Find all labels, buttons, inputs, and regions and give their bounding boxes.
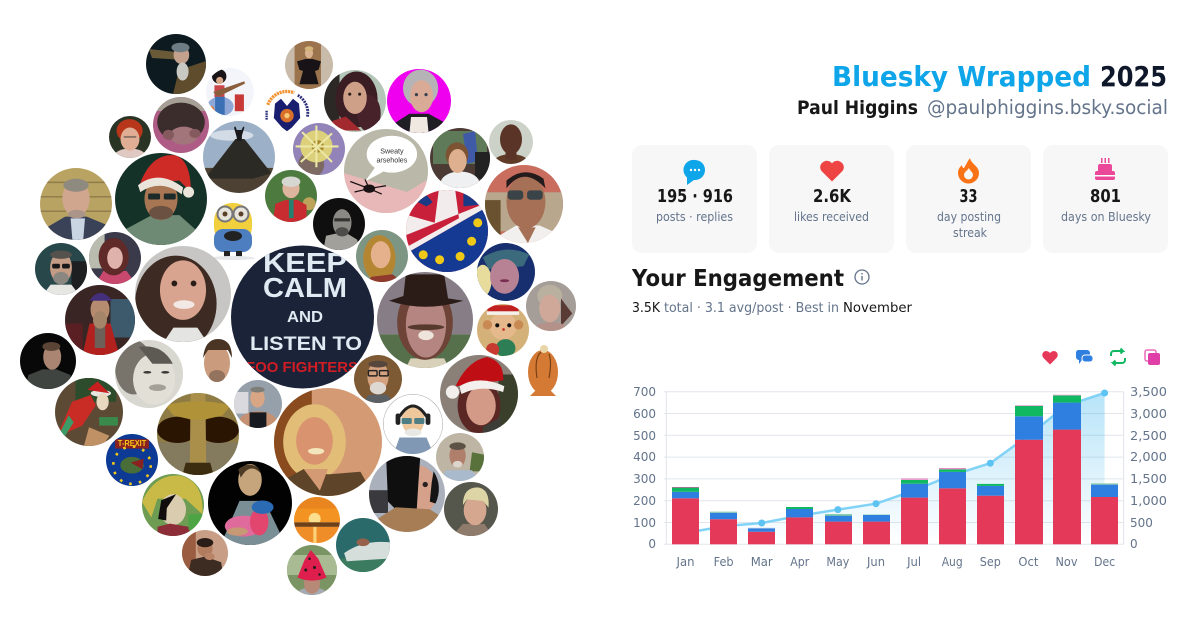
stat card: likes: likes received — [794, 210, 869, 224]
avatar: keep calm poster: CALM — [263, 272, 347, 303]
avatar cluster — [20, 34, 576, 600]
right axis labels: 1,500 — [1130, 472, 1167, 486]
user name and handle — [797, 96, 1168, 119]
bar: Mar — [748, 528, 775, 544]
bar: Oct — [1015, 405, 1043, 544]
avatar: bald man on brick wall — [40, 168, 112, 240]
avatar: keep calm poster: AND — [287, 309, 323, 326]
month labels: Apr — [790, 555, 809, 569]
left axis labels: 400 — [633, 450, 656, 464]
avatar: woman with short blonde hair — [444, 482, 498, 536]
month labels: Aug — [942, 555, 963, 569]
left axis labels: 200 — [633, 494, 656, 508]
month labels: Nov — [1056, 555, 1078, 569]
bar: Dec — [1091, 483, 1118, 544]
cumulative area — [686, 393, 1105, 544]
stat card: posts and replies: posts · replies — [656, 210, 733, 224]
avatar: keep calm poster — [231, 245, 375, 389]
avatar: stone mound — [203, 121, 275, 193]
avatar: man in sunglasses — [485, 165, 563, 243]
left axis labels: 500 — [633, 429, 656, 443]
avatar: woman in santa hat — [440, 355, 518, 434]
avatar: blonde grey woman on magenta — [387, 69, 451, 133]
avatar: t-rexit badge: T-REXIT — [118, 439, 147, 448]
avatar: santa doll — [477, 304, 529, 357]
engagement summary — [632, 300, 912, 316]
avatar: older man with glasses — [354, 355, 402, 403]
user name and handle: @paulphiggins.bsky.social — [927, 96, 1168, 119]
month labels: Jan — [676, 555, 694, 569]
avatar: macaw parrot — [55, 378, 123, 446]
icon: heart — [820, 161, 844, 182]
bar: Jan — [672, 487, 699, 544]
month labels: Dec — [1094, 555, 1115, 569]
bar: Apr — [786, 507, 813, 544]
avatar: red haired older woman — [109, 116, 151, 158]
month labels: May — [826, 555, 849, 569]
avatar: keep calm poster: KEEP — [263, 247, 347, 278]
avatar: UK and EU flag — [406, 190, 488, 272]
stat card: days on Bluesky — [1043, 145, 1168, 253]
avatar: t-rexit badge — [106, 434, 158, 486]
avatar: man in red pointed hat — [287, 545, 337, 600]
icon: flame — [958, 158, 979, 184]
stat card: streak — [906, 145, 1031, 253]
avatar: depressed families logo — [265, 90, 310, 132]
left axis labels — [633, 385, 656, 551]
engagement chart — [633, 385, 1167, 569]
avatar: woman in blue light — [474, 243, 535, 301]
left axis labels: 100 — [633, 516, 656, 530]
avatar: illustrated blonde woman — [356, 230, 408, 282]
stat card: likes: 2.6K — [813, 187, 852, 207]
avatar: spider with speech bubble: arseholes — [376, 157, 408, 165]
engagement summary: 3.5K — [632, 300, 661, 316]
bar: Aug — [939, 468, 966, 544]
avatar: keep calm poster: LISTEN TO — [250, 334, 362, 355]
left axis labels: 600 — [633, 407, 656, 421]
stat card: days on Bluesky: 801 — [1090, 187, 1121, 207]
left axis labels: 700 — [633, 385, 656, 399]
title: 2025 — [1100, 61, 1167, 93]
avatar: woman with EU flags — [430, 128, 490, 188]
icon: legend reposts — [1111, 348, 1125, 366]
avatar: black and white bearded man — [313, 198, 365, 250]
stat card: posts and replies: 195 · 916 — [657, 187, 733, 207]
month labels: Jul — [906, 555, 921, 569]
month labels: Oct — [1018, 555, 1039, 569]
avatar: woman with grey hair — [526, 281, 576, 331]
avatar: old man portrait — [146, 34, 206, 94]
left axis labels: 300 — [633, 472, 656, 486]
stat card: streak: 33 — [960, 187, 978, 207]
avatar: young woman with auburn hair — [89, 232, 141, 284]
icon: cake — [1095, 158, 1115, 180]
avatar: sunset — [294, 497, 340, 543]
title: Bluesky Wrapped — [832, 61, 1091, 93]
grid lines — [664, 392, 1124, 544]
right axis labels: 500 — [1130, 516, 1153, 530]
month labels — [676, 555, 1115, 569]
avatar: woman in black dress — [285, 41, 333, 89]
bar: Jul — [901, 478, 928, 544]
left axis labels: 0 — [648, 537, 656, 551]
bar: Jun — [863, 514, 890, 544]
cumulative line — [686, 393, 1105, 533]
icon: info — [855, 270, 869, 284]
avatar: man with hand on chin — [182, 530, 228, 576]
chart legend — [1042, 348, 1160, 366]
avatar: man in santa hat — [115, 153, 207, 245]
bar: Sep — [977, 484, 1004, 544]
right axis labels: 1,000 — [1130, 494, 1167, 508]
month labels: Jun — [866, 555, 885, 569]
icon: legend replies — [1076, 350, 1093, 364]
line points — [758, 390, 1108, 526]
stat card: likes — [769, 145, 894, 253]
avatar: keep calm poster: FOO FIGHTERS — [246, 359, 358, 376]
engagement summary: total · 3.1 avg/post · Best in — [664, 300, 839, 316]
icon: legend quotes — [1145, 350, 1160, 365]
avatar: woman in green cloche hat — [142, 474, 204, 536]
stat card: posts and replies — [632, 145, 757, 253]
avatar: black and white blonde woman — [115, 340, 183, 408]
right axis labels: 2,500 — [1130, 429, 1167, 443]
avatar: surfer — [336, 518, 390, 572]
right axis labels: 0 — [1130, 537, 1138, 551]
avatar: man in black vest — [234, 380, 282, 428]
avatar: man on dark background — [20, 333, 76, 389]
avatar: hedgehog — [153, 97, 209, 153]
avatar: grey haired man outdoors — [436, 433, 484, 481]
icon: chat bubble — [683, 160, 705, 185]
month labels: Sep — [980, 555, 1001, 569]
avatar: gold helmet mask — [157, 393, 239, 475]
avatar: bearded man with black glasses — [35, 243, 87, 295]
avatar: blonde woman in leopard print — [274, 388, 382, 496]
avatar: orange cartoon creature — [528, 345, 558, 396]
avatar: older woman in red cardigan — [265, 170, 317, 222]
right axis labels: 2,000 — [1130, 450, 1167, 464]
avatar: woman with long dark hair — [324, 70, 386, 132]
heading: your engagement: Your Engagement — [631, 266, 844, 292]
stat card: streak: day posting — [937, 210, 1001, 224]
bar: Feb — [710, 512, 737, 544]
avatar: minion — [211, 203, 255, 260]
avatar: guitarist illustration — [206, 68, 254, 116]
month labels: Feb — [714, 555, 734, 569]
avatar: wizard man in red — [65, 285, 135, 355]
avatar: lady with an ermine parody — [208, 461, 292, 545]
avatar: yellow flower — [293, 123, 345, 178]
right axis labels: 3,500 — [1130, 385, 1167, 399]
avatar: man in brown hat — [377, 272, 473, 368]
stat card: streak: streak — [953, 226, 987, 240]
stat card: days on Bluesky: days on Bluesky — [1061, 210, 1151, 224]
avatar: man's face cutout — [203, 339, 232, 382]
month labels: Mar — [751, 555, 773, 569]
icon: legend heart — [1042, 351, 1058, 364]
bar: Nov — [1053, 395, 1081, 544]
avatar: headphones bitmoji — [383, 394, 443, 454]
engagement summary: November — [843, 300, 912, 316]
avatar: spider with speech bubble — [344, 129, 428, 213]
avatar: spider with speech bubble: Sweaty — [380, 147, 404, 155]
avatar: bald man — [489, 120, 533, 164]
user name and handle: Paul Higgins — [797, 97, 918, 119]
right axis labels — [1130, 385, 1167, 551]
right axis labels: 3,000 — [1130, 407, 1167, 421]
stacked bars — [672, 395, 1118, 544]
avatar: woman with black fringe — [369, 456, 445, 532]
bar: May — [825, 514, 852, 544]
avatar: smiling woman with curly hair — [135, 246, 231, 352]
